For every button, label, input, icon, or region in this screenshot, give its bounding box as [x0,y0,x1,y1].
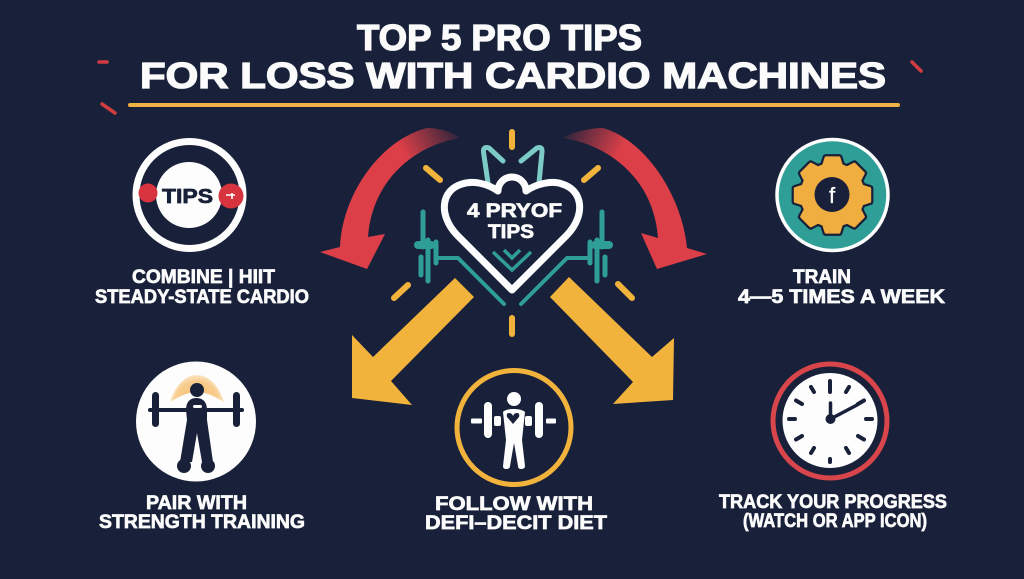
title underline [128,103,900,107]
tip label: TRAIN [793,266,851,288]
tip label: 4—5 TIMES A WEEK [738,286,945,308]
icon: heart outline [444,177,580,290]
tip label: FOLLOW WITH [435,493,593,515]
tip label [425,493,607,534]
panel: deficit diet tip [425,370,607,534]
icon: left teal dumbbell [418,212,504,304]
panel: track progress tip [719,364,947,532]
tip label [99,492,305,533]
icon: clock [773,364,887,478]
icon: tips ring [136,142,244,248]
icon: gear badge [777,140,888,250]
panel: combine HIIT tip [95,142,309,308]
icon: weightlifter [136,362,256,482]
heart label: TIPS [488,222,534,243]
tip label [719,491,947,532]
confetti accents [99,62,921,113]
tip label: TRACK YOUR PROGRESS [719,491,947,513]
tip label: DEFI–DECIT DIET [425,512,607,534]
icon: teal ears [483,148,542,183]
title: FOR LOSS WITH CARDIO MACHINES [140,55,886,96]
icon: gear badge: f [829,183,836,208]
arrow: red left [320,128,460,269]
icon: teal chevrons [493,250,531,270]
tip label: (WATCH OR APP ICON) [743,510,927,532]
tip label: STRENGTH TRAINING [99,511,305,533]
icon: right teal dumbbell [521,212,609,304]
tip label: PAIR WITH [146,492,247,514]
panel: training frequency tip [738,140,945,308]
panel: strength training tip [99,362,305,533]
title: TOP 5 PRO TIPS [357,17,642,58]
tip label: COMBINE | HIIT [132,266,275,288]
heart label: 4 PRYOF [467,201,562,222]
tip label: STEADY-STATE CARDIO [95,286,309,308]
panel: central heart graphic [394,132,632,334]
arrow: yellow right [550,277,674,404]
heart label [467,201,562,243]
arrow: yellow left [352,278,474,405]
tip label [738,266,945,308]
title [140,17,886,96]
sunburst dashes [394,132,632,334]
icon: figure with dumbbell [457,370,571,484]
tip label [95,266,309,308]
icon: tips ring: TIPS [162,186,213,208]
arrow: red right [563,128,707,269]
